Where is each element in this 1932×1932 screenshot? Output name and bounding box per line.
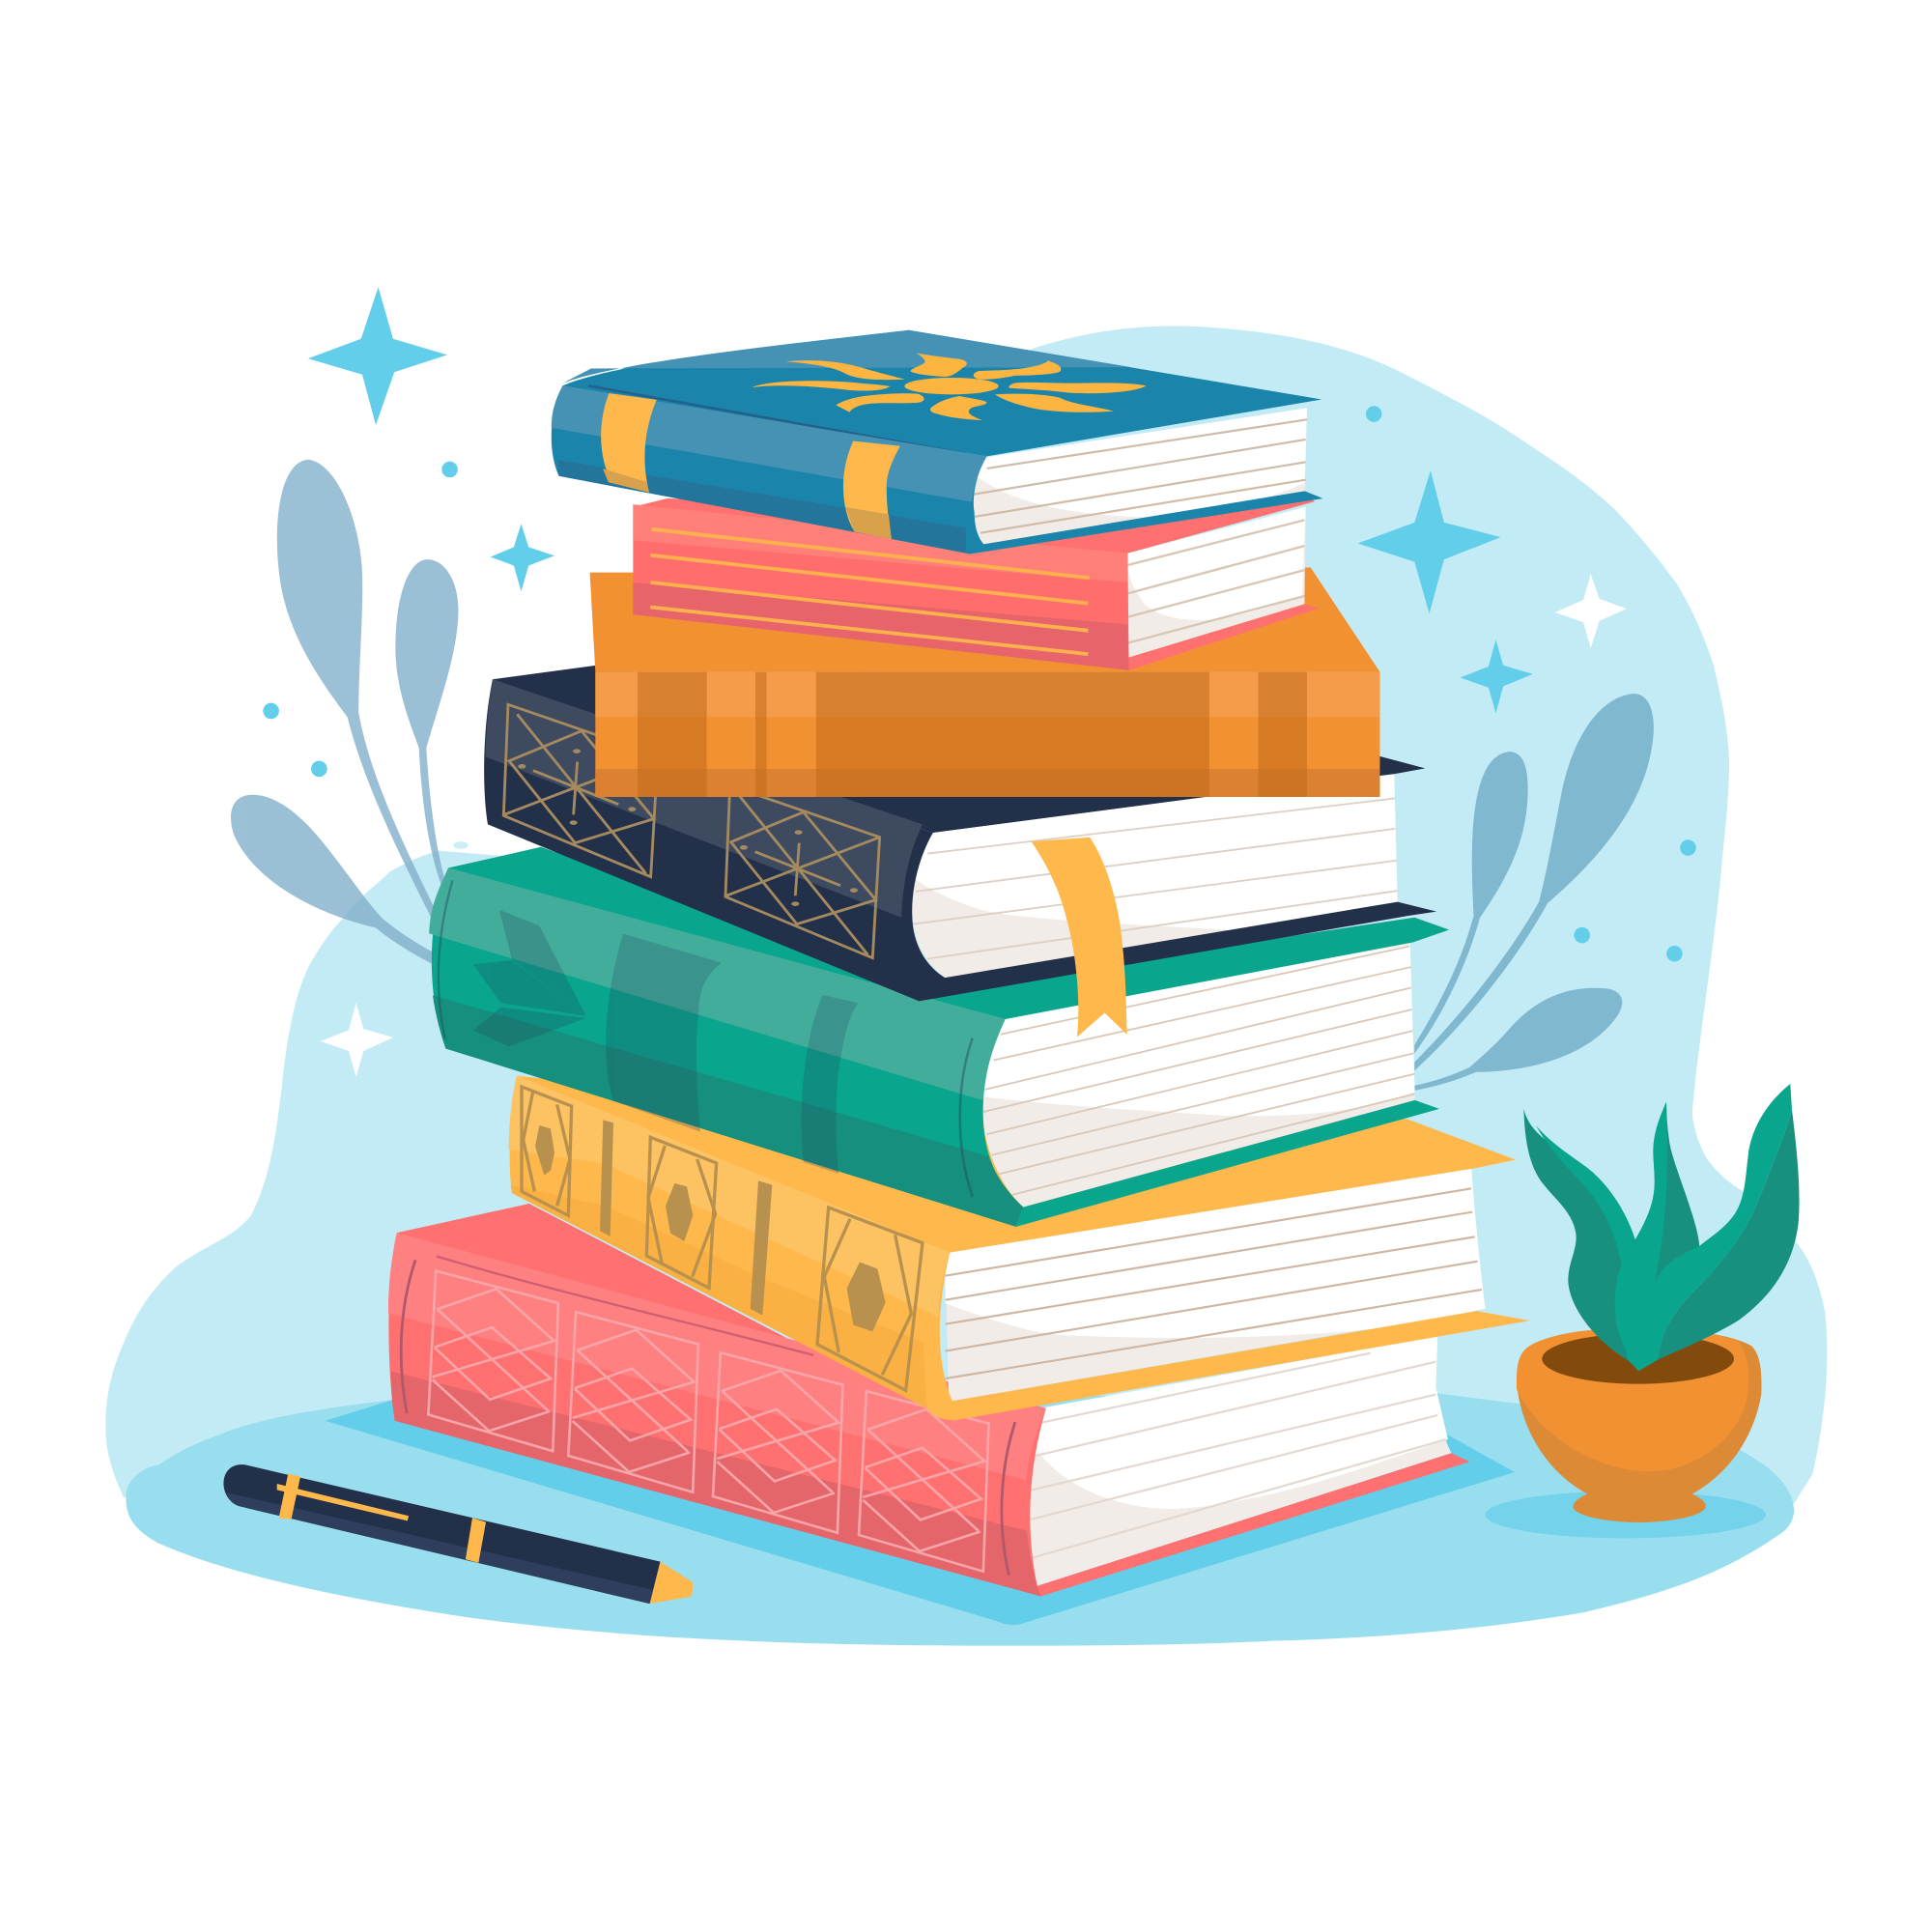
spine ornaments — [473, 910, 858, 1174]
bottom cover — [952, 1311, 1530, 1421]
pages — [912, 774, 1398, 978]
left leaves — [231, 460, 469, 963]
top cover — [493, 666, 1425, 833]
pages, bottom cover and sun emblem — [752, 353, 1323, 554]
pages — [982, 936, 1415, 1208]
top cover — [633, 496, 1315, 554]
spine — [509, 1075, 976, 1420]
leaves — [1523, 1108, 1659, 1370]
book 2: yellow book — [509, 1075, 1530, 1421]
gold ornaments — [503, 704, 880, 958]
spine — [633, 504, 1129, 670]
bookmark — [1031, 838, 1127, 1037]
pot — [1517, 1328, 1762, 1522]
top cover — [517, 1076, 1516, 1253]
bottom cover — [1025, 1453, 1469, 1596]
spine ornaments — [428, 1271, 989, 1572]
pages — [1011, 1336, 1469, 1596]
dots — [263, 406, 1696, 962]
top cover — [590, 568, 1379, 672]
spine — [484, 679, 945, 1001]
bottom cover — [1015, 1100, 1439, 1227]
sun emblem — [752, 353, 1147, 420]
book 6: small coral book — [633, 496, 1318, 670]
book 5: orange book — [590, 568, 1379, 797]
sparkle stars — [308, 287, 1627, 1077]
top cover — [397, 1204, 1046, 1484]
right leaves — [1414, 694, 1654, 1091]
bottom cover — [1127, 604, 1318, 670]
book 4: navy book — [484, 666, 1436, 1037]
background blob — [105, 326, 1827, 1503]
potted plant — [1517, 1084, 1800, 1522]
top cover — [562, 330, 1321, 456]
book shadow on floor — [326, 1400, 1515, 1625]
pen — [223, 1464, 693, 1604]
pages — [1127, 507, 1306, 658]
book 1: coral bottom book — [388, 1204, 1469, 1596]
spine ornaments — [522, 1087, 923, 1390]
spine — [595, 672, 1379, 797]
book 7: blue top book — [552, 330, 1323, 554]
spine — [552, 385, 986, 554]
pages — [946, 1169, 1485, 1402]
bottom cover — [919, 902, 1436, 1001]
floor ellipse — [126, 1394, 1794, 1646]
plant shadow — [1485, 1492, 1766, 1538]
book 3: green book — [429, 847, 1449, 1227]
spine and top cover — [448, 847, 1449, 1019]
spine — [388, 1233, 1046, 1596]
